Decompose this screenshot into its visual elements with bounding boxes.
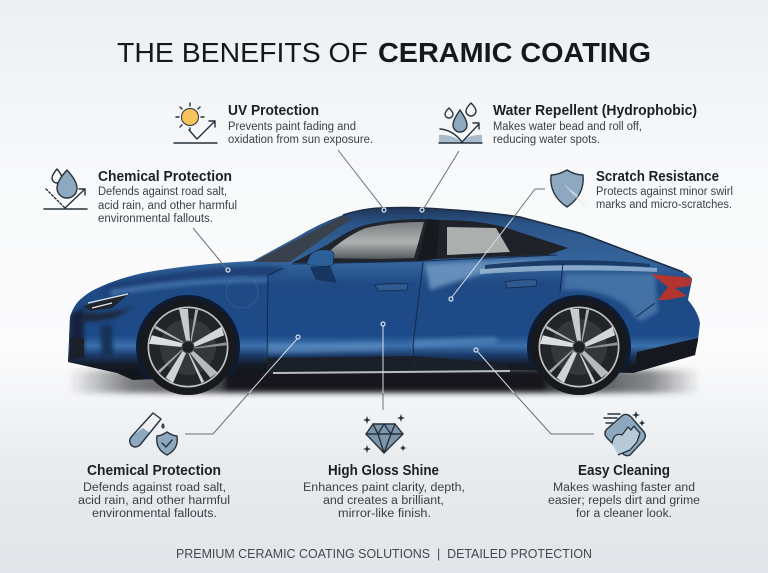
roof edge [343,208,683,272]
front wheel [140,299,236,395]
callout: easy cleaning: Makes washing faster and [553,482,695,494]
callout: chemical protection upper: acid rain, and other harmful [98,200,237,212]
title: CERAMIC COATING [378,37,651,68]
callout: chemical protection lower: Chemical Protection [87,463,221,479]
footer: PREMIUM CERAMIC COATING SOLUTIONS | DETAILED PROTECTION [176,546,592,561]
rear wheel [531,299,627,395]
callout: easy cleaning: easier; repels dirt and grime [548,495,700,507]
icon: scratched shield [551,170,585,207]
callout: chemical protection upper: environmental fallouts. [98,213,213,225]
icon: test tube and shield [130,413,177,455]
callout: water repellent: reducing water spots. [493,134,600,146]
callout: scratch resistance: Scratch Resistance [596,169,719,185]
title [117,37,651,68]
ground shadow [68,368,700,393]
icon: chemical drops [44,169,87,209]
callout: high gloss shine: and creates a brilliant, [323,495,444,507]
callout: chemical protection lower: acid rain, and other harmful [78,495,230,507]
door handles [375,280,537,291]
windshield [253,216,352,262]
callout: easy cleaning: Easy Cleaning [578,463,670,479]
callout: high gloss shine: High Gloss Shine [328,463,439,479]
callout: easy cleaning: for a cleaner look. [576,508,672,520]
callout: UV protection: UV Protection [228,103,319,119]
callout: scratch resistance: marks and micro-scratches. [596,199,732,211]
callout: water repellent: Water Repellent (Hydrophobic) [493,103,697,119]
callout: chemical protection upper [44,169,237,272]
callout: chemical protection upper: Defends against road salt, [98,186,227,198]
fuel flap [226,276,258,308]
callout: high gloss shine [303,322,465,520]
pillar [417,219,440,261]
icon: diamond [363,414,406,453]
icon: water drops on surface [439,103,482,143]
callout: high gloss shine: mirror-like finish. [338,508,431,520]
callout: water repellent [420,103,697,212]
front window [292,219,428,263]
callout: scratch resistance [449,169,733,301]
callout: high gloss shine: Enhances paint clarity, depth, [303,482,465,494]
callout: chemical protection lower [78,335,300,520]
car illustration [68,208,700,399]
callout: chemical protection lower: environmental fallouts. [92,508,217,520]
headlight [83,293,130,311]
body shading [68,257,698,380]
callout: scratch resistance: Protects against minor swirl [596,186,733,198]
chrome sill [273,371,510,373]
icon: hand wiping with cloth [604,411,645,456]
mirror [307,250,337,283]
title: THE BENEFITS OF [117,37,368,68]
callout: water repellent: Makes water bead and roll off, [493,121,642,133]
tail light [651,274,692,300]
callout: chemical protection lower: Defends against road salt, [83,482,226,494]
callout: easy cleaning [474,348,700,520]
rear window [437,220,568,259]
door seams [267,255,655,366]
callout: UV protection: oxidation from sun exposure. [228,134,373,146]
car body [68,208,700,380]
callout: chemical protection upper: Chemical Protection [98,169,232,185]
icon: sun with reflected arrow [174,103,217,143]
callout: UV protection: Prevents paint fading and [228,121,356,133]
callout: UV protection [174,103,386,212]
